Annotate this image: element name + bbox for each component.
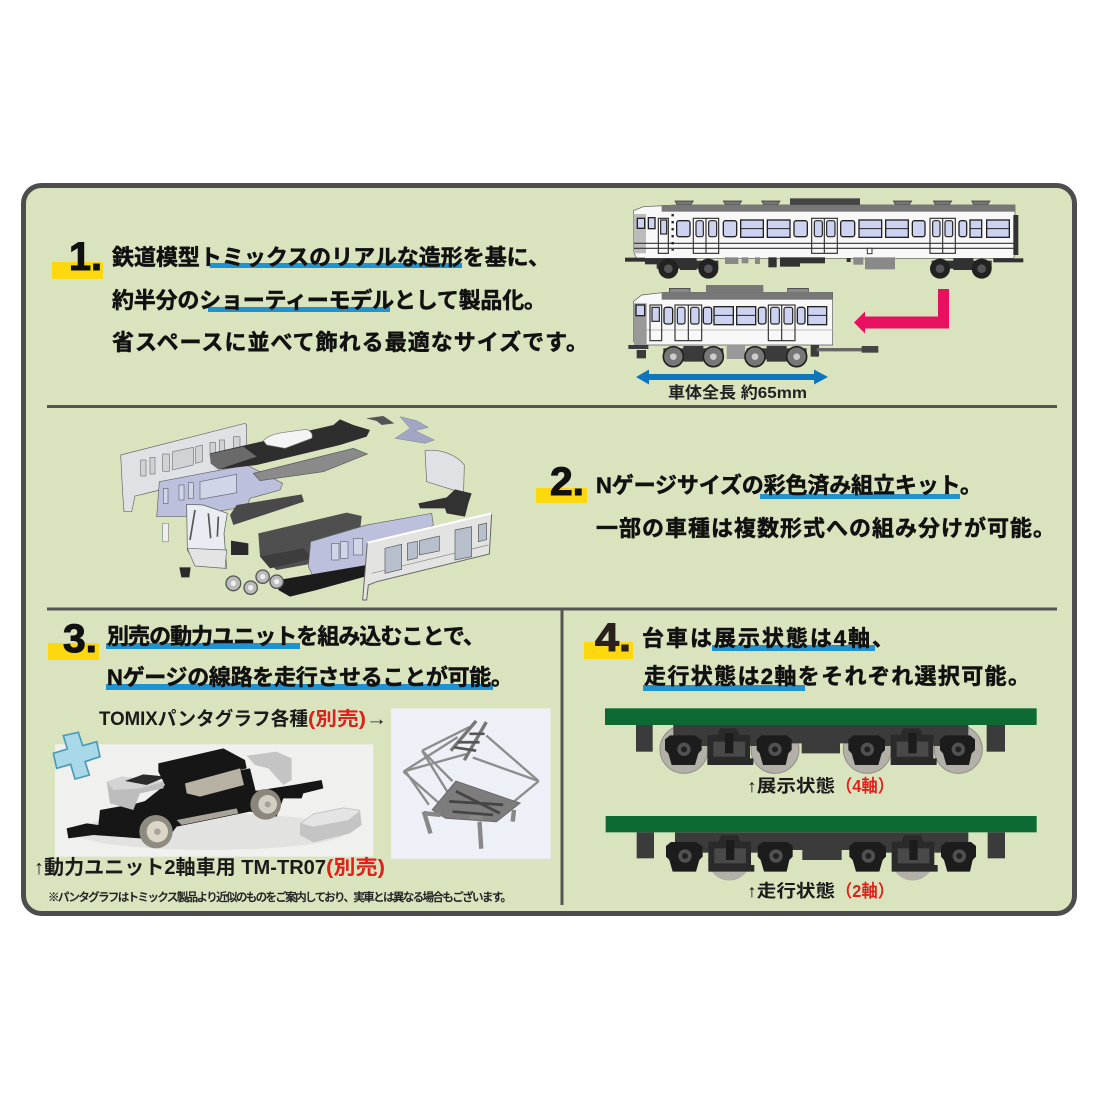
caption: running state <box>747 881 894 901</box>
photo: power unit <box>55 744 373 857</box>
panel: main rounded card <box>24 186 1074 914</box>
text block 4: 走行状態は2軸をそれぞれ選択可能。 <box>644 664 1030 689</box>
photo: pantograph <box>391 708 551 859</box>
number 4: 4. <box>595 616 631 660</box>
section 1: full scale to short model <box>52 198 1023 402</box>
power unit label: (別売) <box>326 856 385 879</box>
power unit label: ↑動力ユニット2軸車用 TM-TR07 <box>34 856 326 879</box>
blue highlights <box>106 643 493 690</box>
length label: 車体全長 約65mm <box>668 383 807 402</box>
section 3: power unit and pantograph <box>34 617 551 904</box>
pantograph label: (別売) <box>308 708 366 730</box>
caption: running state: ↑走行状態 <box>747 881 835 901</box>
section 2: assembly kit <box>121 416 1055 600</box>
illustration: exploded kit <box>121 416 492 600</box>
text block 3: Nゲージの線路を走行させることが可能。 <box>107 665 513 690</box>
text block 1: 省スペースに並べて飾れる最適なサイズです。 <box>112 330 588 355</box>
illustration: short train <box>628 285 878 367</box>
number 3 <box>48 617 99 661</box>
text block 2: Nゲージサイズの彩色済み組立キット。 <box>596 473 982 498</box>
text block 2: 一部の車種は複数形式への組み分けが可能。 <box>596 516 1055 541</box>
section 4: bogie display and running <box>584 616 1037 901</box>
icon: blue plus <box>53 732 100 779</box>
text block 1: 約半分のショーティーモデルとして製品化。 <box>112 288 546 313</box>
pantograph label: TOMIXパンタグラフ各種 <box>99 707 308 730</box>
text block 3 <box>107 624 513 690</box>
blue highlights <box>643 645 875 691</box>
number 2: 2. <box>550 460 584 504</box>
text block 4: 台車は展示状態は4軸、 <box>642 626 894 651</box>
blue highlights <box>208 263 462 312</box>
number 1 <box>52 235 103 279</box>
caption: display state: ↑展示状態 <box>747 776 835 796</box>
illustration: full length train <box>625 198 1023 279</box>
illustration: display state four axle <box>605 708 1037 773</box>
number 2 <box>536 460 587 504</box>
text block 1: 鉄道模型トミックスのリアルな造形を基に、 <box>112 245 550 270</box>
number 4 <box>584 616 633 660</box>
pantograph label <box>99 707 387 730</box>
footnote: ※パンタグラフはトミックス製品より近似のものをご案内しており、実車とは異なる場合もございます。 <box>48 890 512 904</box>
arrow: pink conversion arrow <box>854 289 949 334</box>
caption: running state: （2軸） <box>836 881 894 901</box>
text block 1 <box>112 245 588 355</box>
pantograph label: → <box>366 709 387 730</box>
text block 3: 別売の動力ユニットを組み込むことで、 <box>107 624 485 649</box>
text block 4 <box>642 626 1030 689</box>
text block 2 <box>596 473 1055 541</box>
arrow: blue body length <box>636 370 828 384</box>
number 1: 1. <box>69 235 102 279</box>
caption: display state <box>747 776 894 796</box>
blue highlight <box>760 494 960 499</box>
illustration: running state two axle <box>606 816 1037 881</box>
caption: display state: （4軸） <box>836 776 894 796</box>
number 3: 3. <box>63 617 97 661</box>
